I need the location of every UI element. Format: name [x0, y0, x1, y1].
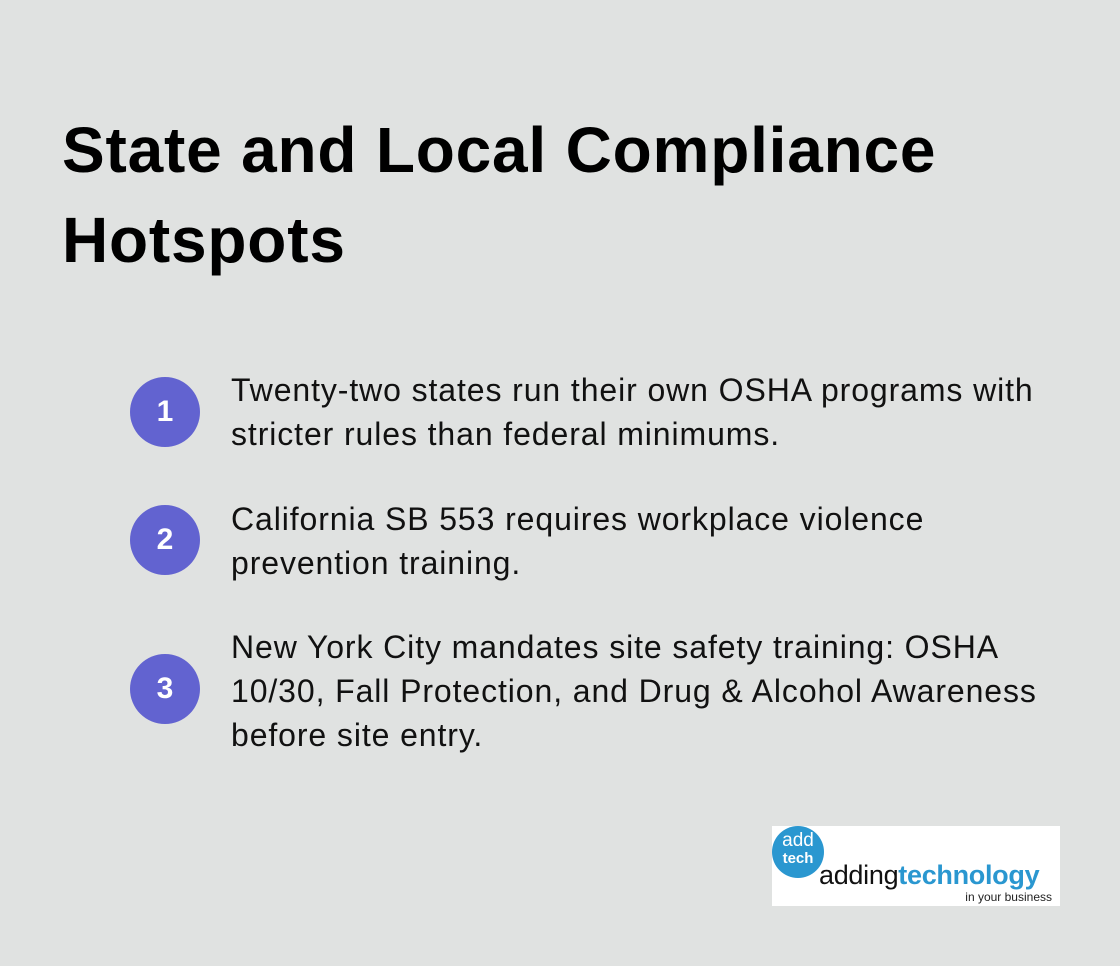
title: State and Local Compliance — [62, 114, 936, 186]
item 3 — [130, 629, 1037, 753]
text 3: 10/30, Fall Protection, and Drug & Alcohol Awareness — [231, 673, 1037, 709]
logo circle: add — [782, 830, 814, 851]
logo: in your business — [965, 890, 1052, 904]
text 3: before site entry. — [231, 717, 483, 753]
logo text: addingtechnology — [819, 860, 1039, 890]
number 3 — [130, 654, 200, 724]
text 2: California SB 553 requires workplace violence — [231, 501, 924, 537]
title: Hotspots — [62, 204, 346, 276]
number 2 — [130, 505, 200, 575]
text 3 — [231, 629, 1037, 753]
text 1 — [231, 372, 1034, 452]
number 3: 3 — [157, 672, 173, 705]
item 2 — [130, 501, 924, 581]
text 1: Twenty-two states run their own OSHA programs with — [231, 372, 1034, 408]
text 3: New York City mandates site safety training: OSHA — [231, 629, 999, 665]
text 2: prevention training. — [231, 545, 521, 581]
title — [62, 114, 936, 276]
item 1 — [130, 372, 1034, 452]
number 1 — [130, 377, 200, 447]
logo circle — [772, 826, 824, 878]
logo — [772, 826, 1060, 906]
text 1: stricter rules than federal minimums. — [231, 416, 780, 452]
number 1: 1 — [157, 395, 173, 428]
logo circle: tech — [783, 850, 813, 867]
text 2 — [231, 501, 924, 581]
number 2: 2 — [157, 523, 173, 556]
